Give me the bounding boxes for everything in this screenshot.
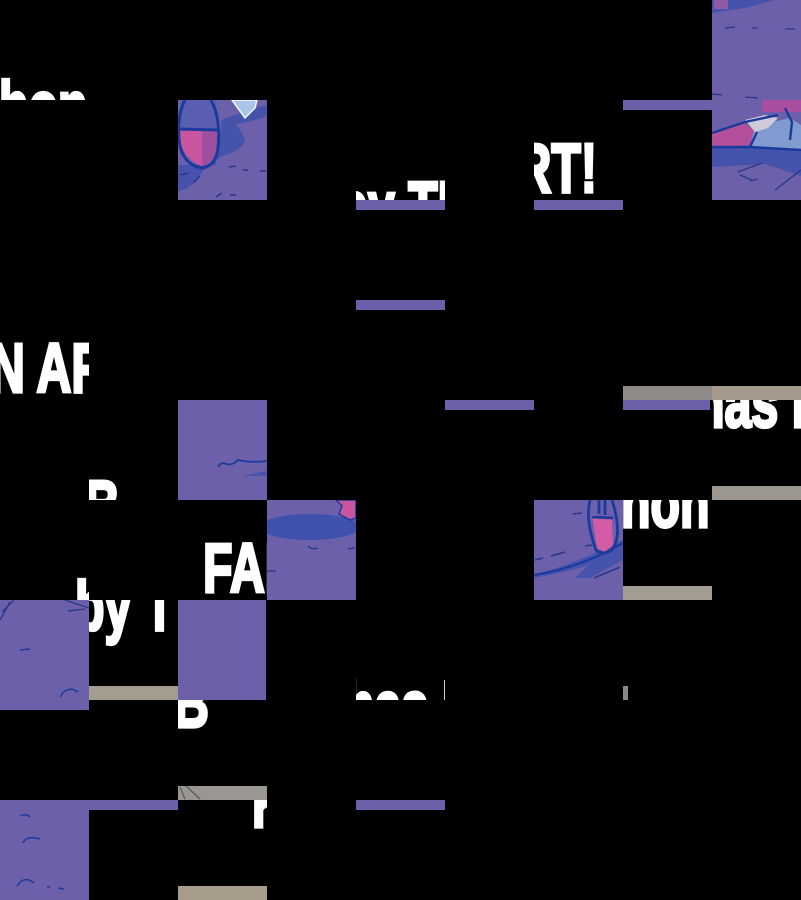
heading fragment: ey TH: ey TH [341,167,473,245]
heading fragment: by T: by T [75,567,174,645]
illustration tile: capsule and crystal [178,100,267,200]
heading fragment: RT!: RT! [517,129,597,207]
heading fragment: has top [356,678,445,700]
illustration tile: ground marks [0,800,89,900]
purple divider bars [89,100,712,810]
heading fragment: hon: hon [0,67,87,145]
heading fragment: non: non [621,464,709,542]
heading fragment: FAR: FAR [203,529,300,607]
illustration tile: plain purple [178,600,266,700]
heading fragment: b ascender: b [75,567,105,645]
heading fragment: B bottom: B [174,664,209,742]
illustration tile: shadow ellipse [267,500,356,600]
heading fragment: B top: B [85,466,120,544]
illustration tile: capsule on ground [534,500,623,600]
illustration tile: ground stroke [178,400,267,500]
heading fragment: K: K [252,764,287,842]
grey photo strips [89,386,801,900]
illustration tile: ground strokes [0,600,89,710]
heading fragment: has top: has [345,667,428,745]
illustration tile: fallen figure [712,0,801,200]
